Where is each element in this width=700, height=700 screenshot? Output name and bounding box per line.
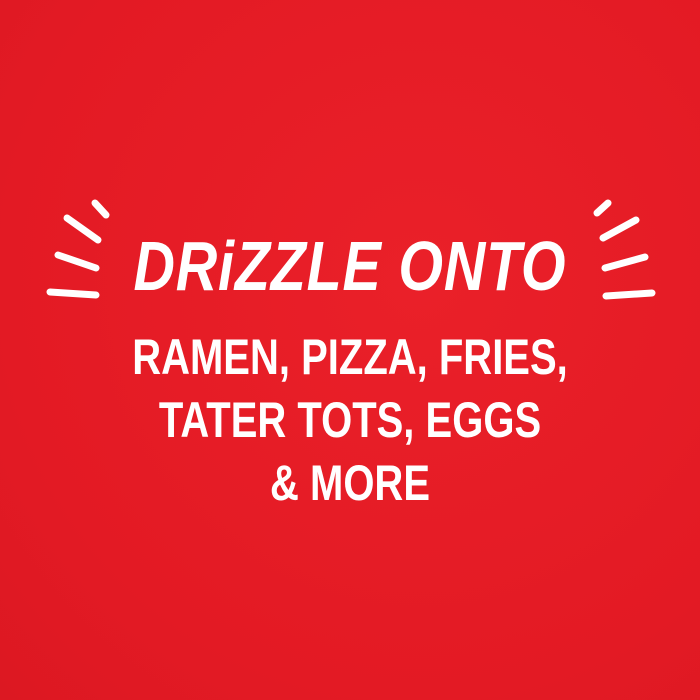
text block: foods: RAMEN, PIZZA, FRIES, (132, 329, 568, 385)
text block: foods (132, 329, 568, 511)
text block: foods: & MORE (270, 455, 430, 511)
title: DRiZZLE ONTO (134, 227, 566, 305)
text block: foods: TATER TOTS, EGGS (159, 392, 541, 448)
